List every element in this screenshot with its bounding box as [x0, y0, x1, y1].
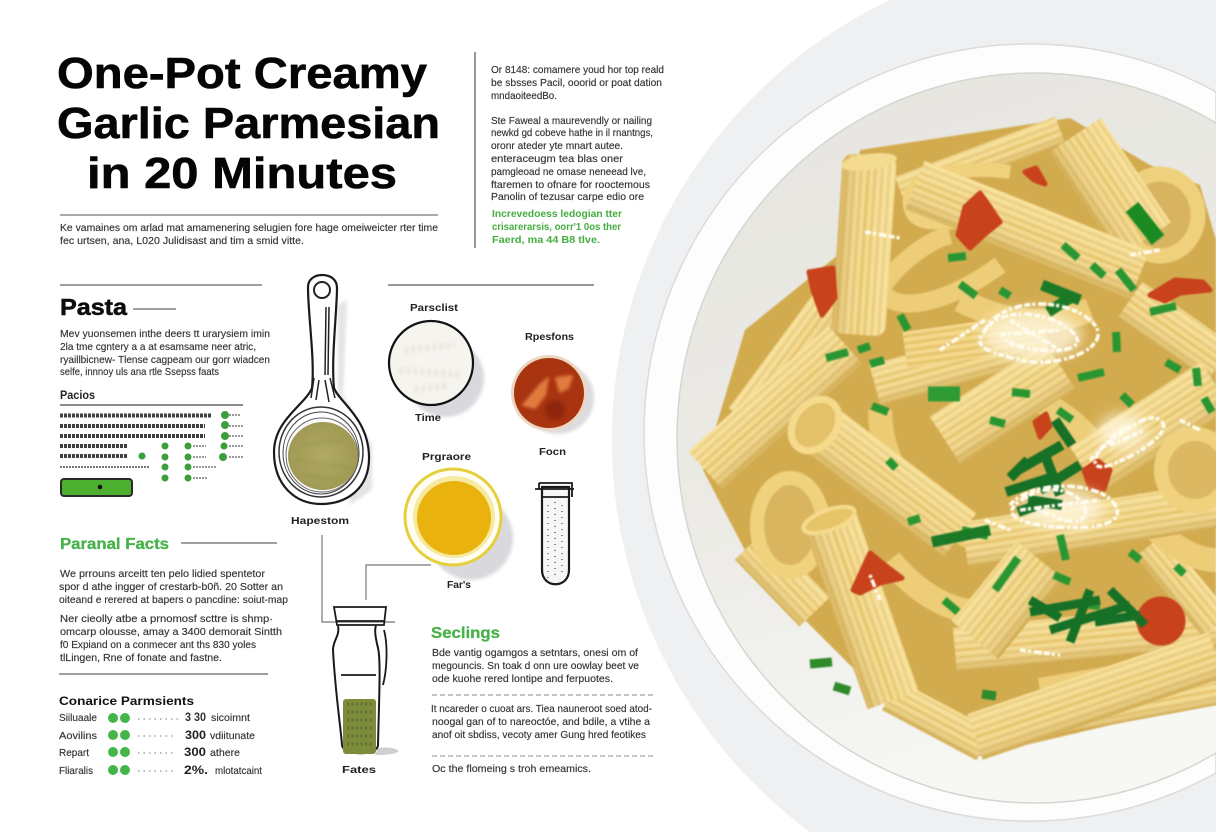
- ribbon loops: [1122, 174, 1198, 256]
- side column text: Increvedoess ledogian tter: [492, 208, 622, 220]
- side column text: enteraceugm tea blas oner: [491, 153, 624, 165]
- panel: conarice parmsients table: vdiitunate: [210, 730, 255, 742]
- panel: seclings: Bde vantig ogamgos a setntars, onesi om of: [432, 647, 638, 659]
- side column text: oronr ateder yte mnart autee.: [491, 140, 623, 152]
- ingredient: oil bowl: Far's: [447, 579, 471, 591]
- parmesan underlay: [982, 311, 1146, 528]
- panel: conarice parmsients table: 2%.: [184, 765, 208, 777]
- side column text: [475, 52, 664, 248]
- ingredient: oil bowl: Prgraore: [422, 451, 471, 463]
- panel: paranal facts: We prrouns arceitt ten pelo lidied spentetor: [60, 568, 266, 580]
- side column text: Panolin of tezusar carpe edio ore: [491, 191, 644, 203]
- side column text: be sbsses Pacil, ooorid or poat dation: [491, 77, 662, 89]
- ingredient: parmesan bowl: Time: [415, 412, 441, 424]
- heading: pasta: Pasta: [60, 294, 127, 320]
- panel: seclings: It ncareder o cuoat ars. Tiea nauneroot soed atod-: [431, 703, 652, 715]
- ingredient: tomato bowl: Rpesfons: [525, 331, 574, 343]
- panel: seclings: Oc the flomeing s troh emeamics.: [432, 763, 591, 775]
- panel: conarice parmsients table: 300: [185, 730, 206, 742]
- panel: seclings: noogal gan of to nareoctóe, and bdile, a vtihe a: [432, 716, 650, 728]
- title: Garlic Parmesian: [57, 99, 440, 148]
- panel: seclings: [431, 625, 655, 775]
- photo: plate and bowl of pasta: [612, 0, 1216, 832]
- panel: paranal facts: tlLingen, Rne of fonate and fastne.: [60, 652, 222, 664]
- panel: seclings: ode kuohe rered lontipe and ferpuotes.: [432, 673, 613, 685]
- label: Hapestom: [291, 515, 349, 527]
- side column text: Ste Faweal a maurevendly or nailing: [491, 115, 652, 127]
- ingredient: tomato bowl: [511, 331, 594, 434]
- side column text: ftaremen to ofnare for rooctemous: [491, 179, 650, 191]
- grated parmesan: [865, 232, 1200, 655]
- intro text: [60, 215, 438, 247]
- side column text: pamgleoad ne omase neneead lve,: [491, 166, 646, 178]
- ingredient: test tube with seasoning: Focn: [539, 446, 566, 458]
- panel: paranal facts: Paranal Facts: [60, 536, 169, 553]
- title: [57, 49, 440, 198]
- intro text: fec urtsen, ana, L020 Julidisast and tim a smid vitte.: [60, 235, 304, 247]
- panel: paranal facts: spor d athe ingger of crestarb-b0ñ. 20 Sotter an: [59, 581, 283, 593]
- panel: paranal facts: [59, 536, 288, 674]
- side column text: newkd gd cobeve hathe in il rnantngs,: [491, 127, 653, 139]
- panel: conarice parmsients table: [59, 694, 262, 777]
- panel: paranal facts: Ner cieolly atbe a prnomosf scttre is shmp·: [60, 613, 273, 625]
- panel: conarice parmsients table: Repart: [59, 747, 89, 759]
- panel: conarice parmsients table: Conarice Parmsients: [59, 694, 194, 708]
- ingredient: oil bowl: [405, 451, 513, 591]
- panel: conarice parmsients table: mlotatcaint: [215, 765, 262, 777]
- panel: conarice parmsients table: 3 30: [185, 712, 206, 724]
- side column text: mndaoiteedBo.: [491, 90, 557, 102]
- panel: conarice parmsients table: Siiluaale: [59, 712, 97, 724]
- panel: paranal facts: omcarp olousse, amay a 3400 demorait Sintth: [60, 626, 282, 638]
- title: in 20 Minutes: [87, 149, 397, 198]
- ingredient: parmesan bowl: [389, 302, 484, 424]
- pasta: [688, 117, 1216, 760]
- title: One-Pot Creamy: [57, 49, 428, 98]
- pasta body text: 2la tme cgntery a a at esamsame neer atric,: [60, 341, 256, 353]
- green herbs: [810, 207, 1212, 696]
- panel: conarice parmsients table: Fliaralis: [59, 765, 93, 777]
- leader lines: [322, 535, 431, 622]
- tomatoes: [809, 168, 1210, 643]
- label: Fates: [342, 764, 376, 776]
- side column text: Or 8148: comamere youd hor top reald: [491, 64, 664, 76]
- side column text: Faerd, ma 44 B8 tlve.: [492, 234, 600, 246]
- panel: paranal facts: f0 Expiand on a conmecer ant ths 830 yoles: [60, 639, 256, 651]
- panel: seclings: megouncis. Sn toak d onn ure oowlay beet ve: [432, 660, 639, 672]
- bowl rim: [644, 44, 1216, 821]
- pasta body text: [60, 328, 270, 378]
- icon: measuring spoon with herb powder: [274, 275, 372, 527]
- panel: seclings: Seclings: [431, 625, 500, 642]
- panel: paranal facts: oiteand e rerered at bapers o pancdine: soiut-map: [59, 594, 288, 606]
- ingredient: test tube with seasoning: [535, 446, 574, 584]
- panel: seclings: anof oit sbdiss, vecoty amer Gung hred feotikes: [432, 729, 646, 741]
- pasta body text: Mev yuonsemen inthe deers tt urarysiem imin: [60, 328, 270, 340]
- green progress button: [61, 479, 132, 496]
- intro text: Ke vamaines om arlad mat amamenering selugien fore hage omeiweicter rter time: [60, 222, 438, 234]
- panel: pasta: [60, 285, 270, 496]
- panel: conarice parmsients table: Aovilins: [59, 730, 97, 742]
- bowl interior: [677, 73, 1216, 803]
- panel: conarice parmsients table: sicoimnt: [211, 712, 250, 724]
- subheading: pacios: Pacios: [60, 390, 95, 402]
- icon: spice jar: [333, 607, 398, 776]
- pasta body text: ryaillbicnew- Tlense cagpeam our gorr wiadcen: [60, 354, 270, 366]
- facts table: [60, 411, 244, 482]
- panel: conarice parmsients table: athere: [210, 747, 240, 759]
- plate: [612, 0, 1216, 832]
- ingredient: parmesan bowl: Parsclist: [410, 302, 459, 314]
- pasta body text: selfe, innnoy uls ana rtle Ssepss faats: [60, 366, 219, 378]
- panel: conarice parmsients table: 300: [184, 747, 206, 759]
- side column text: crisarerarsis, oorr'1 0os ther: [492, 221, 621, 233]
